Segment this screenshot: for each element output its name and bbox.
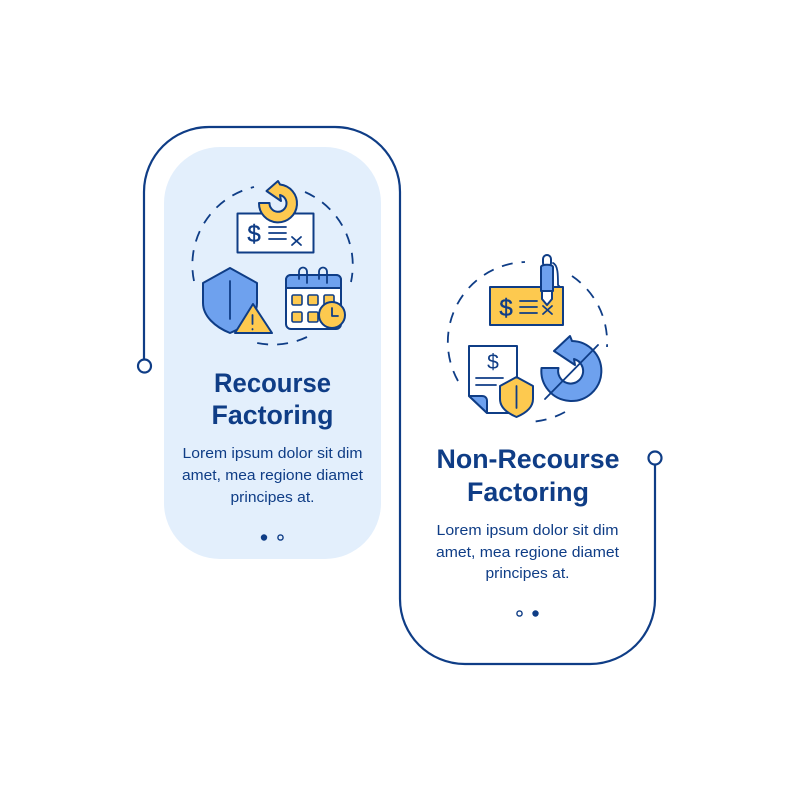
text block: non-recourse description: amet, mea regione diamet — [436, 544, 620, 561]
pagination dots — [517, 610, 539, 617]
connecting outline frame — [138, 127, 662, 664]
heading: recourse factoring: Factoring — [212, 400, 334, 430]
heading: non-recourse factoring: Non-Recourse — [436, 444, 620, 474]
heading: recourse factoring: Recourse — [214, 368, 331, 398]
icon: non-recourse factoring group — [448, 255, 607, 422]
icon: recourse factoring group — [192, 181, 353, 345]
text block: recourse description: principes at. — [230, 489, 314, 506]
text block: non-recourse description: Lorem ipsum dolor sit dim — [436, 522, 618, 539]
text block: recourse description: Lorem ipsum dolor sit dim — [182, 445, 362, 462]
panel: recourse factoring — [164, 147, 381, 559]
panel: non-recourse factoring — [436, 255, 620, 617]
icon: recourse factoring group: $ — [247, 221, 261, 248]
text block: non-recourse description: principes at. — [486, 565, 570, 582]
pagination dots — [261, 534, 283, 541]
icon: non-recourse factoring group: $ — [499, 295, 513, 322]
text block: recourse description: amet, mea regione diamet — [182, 467, 364, 484]
icon: non-recourse factoring group: $ — [487, 351, 499, 374]
heading: non-recourse factoring: Factoring — [467, 477, 589, 507]
